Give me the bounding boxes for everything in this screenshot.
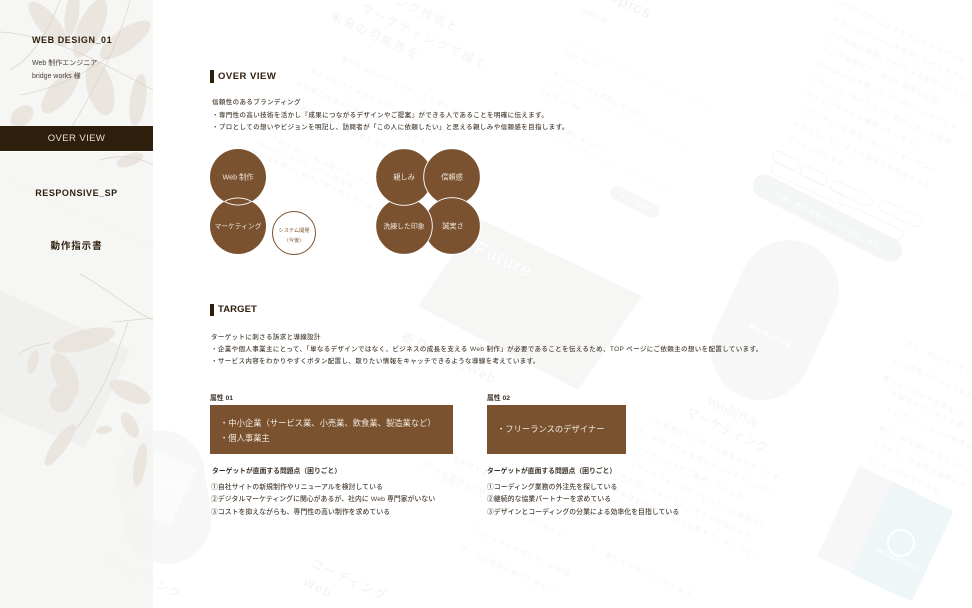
faint copy: coding column: HTML/CSSによるモダンなデザイン実: [837, 0, 967, 66]
faint copy: coding column: ポートいたします。: [785, 135, 853, 172]
faint copy: coding column: から、JavaScriptを使用したインタラク: [831, 14, 968, 84]
device mockup: wordpress: [817, 466, 954, 602]
faint copy: web marketing heading: 未来の可能性を: [328, 9, 423, 63]
faint copy: web marketing column: る、Webサイト専用とデジタルマーケティ: [635, 426, 777, 498]
faint copy: topics: 2025.00.00: [540, 88, 582, 113]
attribute 01 label: 属性 01: [210, 394, 233, 402]
pill image: coding: [111, 425, 217, 569]
faint copy: coding column: ィブな機能開発、PHPによる堅牢なバック: [827, 29, 970, 102]
text block: target: ・企業や個人事業主にとって、「単なるデザインではなく、ビジネスの成長を支える Web 制作」が必要であることを伝えるため、TOP ページにご依頼主の想いを配置しています。: [211, 346, 763, 353]
faint copy: partner column: ゴールを見据えた戦略: [419, 459, 495, 501]
faint copy: partner column: サイトを制作するだけでなく: [429, 444, 527, 496]
faint copy: coding column: を両立し、ビジネスの成長を技術面からサ: [791, 119, 933, 191]
diagram: service circles: Web 制作: [222, 172, 254, 182]
faint copy: topics: [531, 0, 655, 155]
faint copy: right column: ことを心がけています。: [865, 454, 948, 499]
faint copy: topics: [お知らせ]: [581, 7, 610, 25]
faint copy: intro paragraph: [249, 54, 467, 215]
nav: responsive: RESPONSIVE_SP: [35, 188, 118, 198]
device mockup: wordpress: WORDPRESS: [875, 547, 920, 573]
attribute 02 box: ・フリーランスのデザイナー: [497, 424, 605, 434]
text block: over view: [212, 98, 569, 131]
button: contact flow: 料金、制作の流れについてはこちら: [774, 190, 882, 251]
text block: target: [211, 333, 763, 365]
faint copy: right column: 青など、サイトの集客力: [881, 374, 964, 419]
attribute 01 problems list: ②デジタルマーケティングに関心があるが、社内に Web 専門家がいない: [211, 496, 435, 503]
faint copy: coding column: [785, 0, 970, 191]
faint copy: bottom coding: コーディング: [309, 555, 390, 604]
faint copy: topics: 2025.00.00: [560, 47, 602, 72]
faint copy: intro paragraph: 私はお客様のために最適なものでなければ: [277, 94, 419, 166]
attribute 02 problems list: ①コーディング業務の外注先を探している: [487, 484, 617, 490]
faint copy: web marketing heading: マーケティングで描く: [359, 1, 491, 73]
faint copy: coding column: エンド構築まで、幅広い開発に対応。: [821, 44, 948, 109]
attribute 01 box: ・個人事業主: [220, 433, 270, 443]
faint copy: right column: [865, 339, 972, 499]
faint tags: [769, 150, 924, 242]
button: all topics: ALL Topics: [619, 193, 655, 216]
attribute 02 label: 属性 02: [487, 394, 510, 402]
diagram: brand value circles: 誠実さ: [442, 222, 464, 230]
diagram: brand value circles: 洗練した印象: [383, 222, 425, 230]
panel: sidebar: [0, 0, 153, 608]
pill image: web marketing: Marketing: [747, 322, 793, 350]
attribute 02 problems list: ②継続的な協業パートナーを求めている: [487, 496, 611, 503]
button: all topics: [608, 184, 662, 220]
text block: over view: 信頼性のあるブランディング: [212, 99, 301, 106]
faint copy: coding column: WordPressを用いたコーポレートサイトや: [815, 60, 959, 133]
nav: active over view bar: [0, 126, 153, 152]
image panel: future: [418, 218, 642, 390]
faint copy: right column: しており、技術的な説明も分: [871, 439, 969, 490]
faint copy: bottom coding: [104, 553, 390, 604]
faint dotted rules: [5, 40, 710, 250]
text: TARGET: [218, 304, 257, 315]
attribute 02 problems heading: ターゲットが直面する問題点（困りごと）: [487, 468, 616, 475]
faint copy: web marketing column: スマートフォンやタブレットにも最適化さ: [627, 459, 769, 531]
faint copy: intro paragraph: 美しいだけではありません。ただ見た目だけ: [309, 66, 458, 141]
faint copy: partner column: き、その実現に向けて歩んで: [459, 544, 556, 595]
text block: target: ・サービス内容をわかりやすくボタン配置し、取りたい情報をキャッチできるような導線を考えています。: [211, 358, 540, 365]
heading: target: [210, 304, 214, 316]
heading: over view: [210, 70, 214, 83]
attribute 02 box: [487, 405, 626, 454]
attribute 01 box: ・中小企業（サービス業、小売業、飲食業、製造業など）: [220, 418, 436, 428]
faint copy: web marketing column: れた使いやすいウェブサイトの設計から、: [619, 472, 761, 544]
faint copy: web marketing column: で一貫してサポートいたします。: [589, 545, 700, 602]
faint copy: intro paragraph: を理解し効果的に戦略を立てるものです: [294, 79, 428, 148]
faint copy: intro paragraph: な視点を持って制作に取り組んでいます: [249, 147, 383, 215]
attribute 01 problems list: [211, 483, 435, 516]
attribute 01 problems list: ③コストを抑えながらも、専門性の高い制作を求めている: [211, 508, 390, 516]
attribute 01 box: [210, 405, 453, 454]
faint copy: web marketing column: Web制作&: [705, 393, 762, 430]
faint copy: topics: ブログを更新しました。: [531, 112, 610, 155]
diagram: service circles: （今後）: [284, 236, 304, 244]
diagram: service circles: [210, 149, 480, 255]
nav: instructions: 動作指示書: [50, 241, 102, 252]
pill image: coding: Coding: [162, 477, 191, 496]
faint copy: web marketing column: マーケティング: [684, 405, 771, 456]
text block: over view: ・専門性の高い技術を活かし『成果につながるデザインやご提案』ができる人であることを明確に伝えます。: [212, 112, 548, 118]
diagram: brand value circles: 信頼感: [441, 172, 463, 182]
nav: active over view bar: OVER VIEW: [48, 133, 105, 144]
text: OVER VIEW: [218, 71, 276, 82]
faint copy: right column: 特に、お客様との密なコミュ: [877, 424, 972, 476]
text block: target: ターゲットに刺さる訴求と導線設計: [211, 334, 321, 341]
text block: over view: ・プロとしての想いやビジョンを明記し、訪問者が「この人に依頼したい」と思える親しみや信頼感を目指します。: [212, 124, 569, 131]
faint copy: bottom coding: コーディング: [104, 553, 185, 602]
faint copy: intro paragraph: Webマーケティングの両方を: [257, 139, 356, 191]
faint copy: partner column: [399, 329, 572, 595]
faint copy: web marketing heading: [303, 0, 491, 73]
attribute 02 problems list: [487, 482, 679, 516]
faint copy: web marketing column: [589, 393, 781, 602]
faint copy: coding column: スピーディーな開発と高いパフォーマンス: [797, 104, 938, 176]
sidebar subtitle: bridge works 様: [32, 73, 81, 80]
leaves decoration: [0, 0, 153, 486]
image panel: left service: [0, 272, 130, 448]
diagram: brand value circles: [376, 149, 480, 254]
faint copy: web marketing column: お客様を実現するSEO対策まで、オンライン: [611, 486, 761, 562]
attribute 01 problems heading: ターゲットが直面する問題点（困りごと）: [212, 468, 341, 475]
attribute 02 problems list: ③デザインとコーディングの分業による効率化を目指している: [487, 508, 679, 516]
image panel: future: Future: [472, 238, 536, 281]
button: contact flow: [748, 170, 906, 266]
faint copy: partner column: 寄り添ったWeb: [399, 329, 499, 386]
faint copy: intro paragraph: 優れたWebサイトとは、ただ見た目が: [339, 54, 467, 120]
faint copy: topics: ホームページを開設しました。: [551, 70, 649, 121]
faint copy: coding column: なウェブサイトを構築いたします。: [804, 89, 923, 151]
diagram: brand value circles: 親しみ: [393, 172, 415, 182]
diagram: service circles: マーケティング: [214, 222, 262, 230]
pill image: web marketing: [695, 224, 855, 416]
faint copy: intro paragraph: そのために、私は常にコーディング: [269, 134, 388, 196]
attribute 01 problems list: ①自社サイトの新規制作やリニューアルを検討している: [211, 484, 383, 490]
faint copy: partner column: 力強いパートナーとなりたいと考えて: [439, 474, 566, 539]
faint copy: web marketing column: ングサービスをご提供しています。: [633, 444, 752, 506]
faint copy: web marketing column: 「お客様のビジネスの成長をサポートす: [647, 414, 781, 483]
faint copy: coding column: ブログ、ECサイトなど、目的に応じた最適: [809, 74, 953, 147]
sidebar title: WEB DESIGN_01: [32, 35, 112, 45]
faint copy: partner column: プロジェクトを通じて、お客様: [467, 524, 572, 579]
sidebar subtitle: Web 制作エンジニア: [32, 60, 97, 67]
sidebar subtitle: [32, 59, 97, 80]
diagram: service circles: システム開発: [279, 226, 310, 234]
faint copy: bottom coding: Web: [301, 575, 334, 601]
